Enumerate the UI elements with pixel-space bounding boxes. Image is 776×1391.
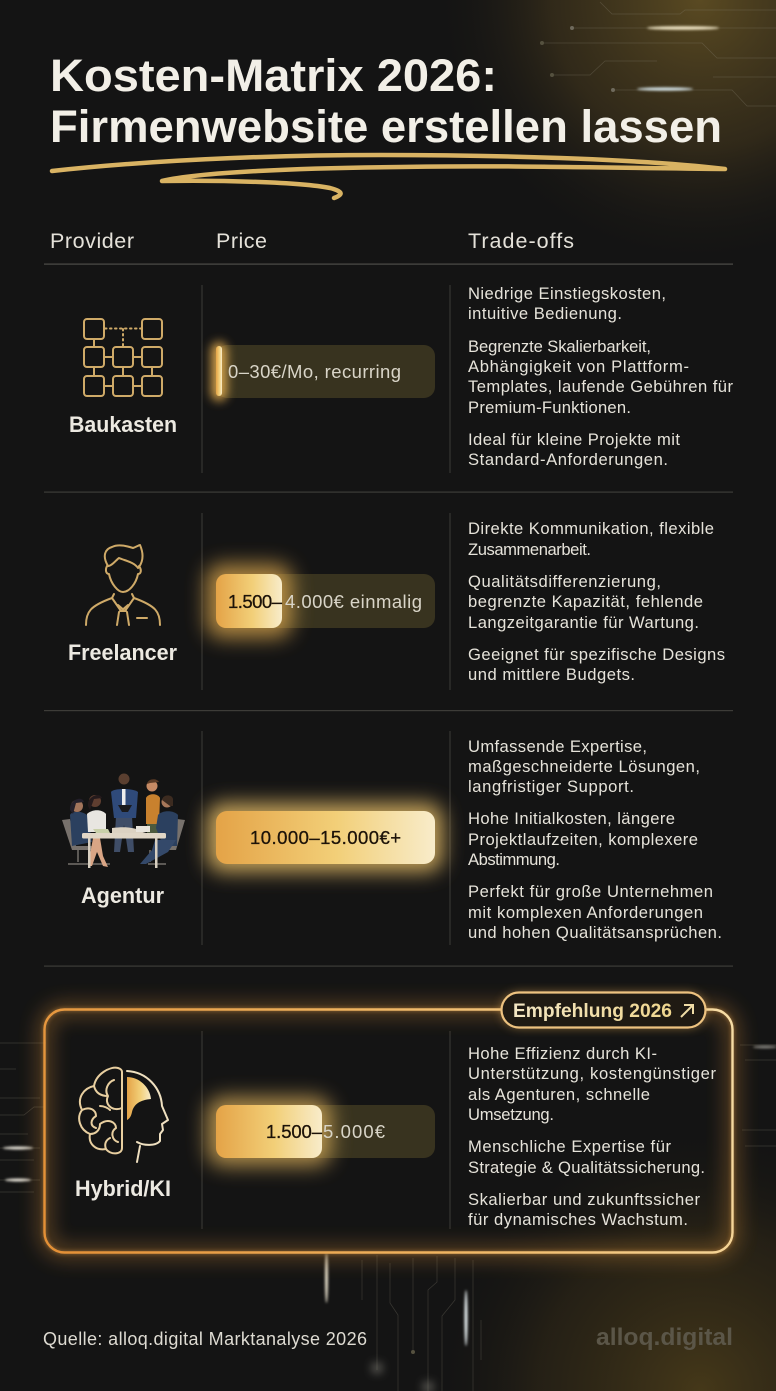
trade-offs: Agentur: Perfekt für große Unternehmen <box>468 882 713 901</box>
trade-offs: Freelancer: Langzeitgarantie für Wartung. <box>468 613 699 632</box>
trade-offs: Hybrid/KI: Menschliche Expertise für <box>468 1137 671 1156</box>
trade-offs: Freelancer: Direkte Kommunikation, flexible <box>468 519 714 538</box>
icon: building blocks <box>84 319 162 396</box>
price bar: Baukasten <box>211 342 435 401</box>
price bar: Hybrid/KI: 5.000€ <box>323 1121 386 1142</box>
table header <box>44 229 733 265</box>
panel: Freelancer row <box>68 519 725 684</box>
trade-offs: Agentur: maßgeschneiderte Lösungen, <box>468 757 700 776</box>
label: Hybrid/KI: Hybrid/KI <box>75 1176 171 1201</box>
trade-offs: Hybrid/KI: als Agenturen, schnelle <box>468 1085 650 1104</box>
trade-offs: Baukasten: Niedrige Einstiegskosten, <box>468 284 666 303</box>
price bar: Hybrid/KI: 1.500– <box>266 1121 323 1142</box>
badge: Empfehlung 2026: Empfehlung 2026 <box>513 1001 672 1022</box>
highlight frame <box>44 1010 732 1252</box>
trade-offs: Baukasten: intuitive Bedienung. <box>468 304 622 323</box>
trade-offs: Hybrid/KI: Unterstützung, kostengünstiger <box>468 1064 716 1083</box>
label: Freelancer: Freelancer <box>68 640 177 665</box>
trade-offs: Hybrid/KI <box>468 1044 716 1229</box>
price bar: Freelancer <box>206 564 435 638</box>
price bar: Hybrid/KI <box>207 1097 435 1166</box>
trade-offs: Agentur: Umfassende Expertise, <box>468 737 647 756</box>
circuit decoration: left <box>0 1043 46 1192</box>
trade-offs: Freelancer: und mittlere Budgets. <box>468 665 635 684</box>
icon: agency team at table <box>62 774 185 868</box>
panel: Hybrid/KI recommended row <box>44 992 732 1252</box>
panel: Agentur row <box>62 737 722 942</box>
source note: Quelle: alloq.digital Marktanalyse 2026 <box>43 1329 367 1349</box>
trade-offs: Agentur: mit komplexen Anforderungen <box>468 903 703 922</box>
trade-offs: Baukasten: Begrenzte Skalierbarkeit, <box>468 337 651 356</box>
trade-offs: Freelancer: Geeignet für spezifische Designs <box>468 645 725 664</box>
trade-offs: Agentur: Projektlaufzeiten, komplexere <box>468 830 698 849</box>
trade-offs: Agentur: Abstimmung. <box>468 850 560 869</box>
table header: Provider <box>50 229 134 253</box>
trade-offs: Hybrid/KI: für dynamisches Wachstum. <box>468 1210 688 1229</box>
trade-offs: Agentur: langfristiger Support. <box>468 777 634 796</box>
icon: freelancer person <box>86 545 160 625</box>
trade-offs: Agentur <box>468 737 722 942</box>
circuit decoration: top right <box>540 2 776 106</box>
circuit decoration: right <box>740 1045 776 1146</box>
trade-offs: Agentur: Hohe Initialkosten, längere <box>468 809 675 828</box>
panel: Baukasten row <box>69 284 733 469</box>
trade-offs: Hybrid/KI: Strategie & Qualitätssicherung. <box>468 1158 705 1177</box>
trade-offs: Baukasten: Standard-Anforderungen. <box>468 450 668 469</box>
trade-offs: Agentur: und hohen Qualitätsansprüchen. <box>468 923 722 942</box>
trade-offs: Baukasten <box>468 284 733 469</box>
title <box>50 50 722 152</box>
table header: Price <box>216 229 267 253</box>
trade-offs: Freelancer: begrenzte Kapazität, fehlende <box>468 592 703 611</box>
trade-offs: Freelancer <box>468 519 725 684</box>
price bar: Freelancer: 4.000€ einmalig <box>285 591 422 612</box>
table header: Trade-offs <box>468 229 574 253</box>
circuit decoration: bottom <box>325 1253 481 1391</box>
trade-offs: Freelancer: Qualitätsdifferenzierung, <box>468 572 661 591</box>
badge: Empfehlung 2026 <box>502 992 706 1028</box>
label: Baukasten: Baukasten <box>69 412 177 437</box>
price bar: Agentur: 10.000–15.000€+ <box>250 827 401 848</box>
label: Agentur: Agentur <box>81 883 164 908</box>
trade-offs: Baukasten: Ideal für kleine Projekte mit <box>468 430 680 449</box>
trade-offs: Hybrid/KI: Umsetzung. <box>468 1105 554 1124</box>
trade-offs: Hybrid/KI: Hohe Effizienz durch KI- <box>468 1044 657 1063</box>
trade-offs: Baukasten: Abhängigkeit von Plattform- <box>468 357 689 376</box>
trade-offs: Baukasten: Premium-Funktionen. <box>468 398 631 417</box>
icon: brain and head <box>79 1068 168 1162</box>
trade-offs: Freelancer: Zusammenarbeit. <box>468 540 591 559</box>
trade-offs: Hybrid/KI: Skalierbar und zukunftssicher <box>468 1190 700 1209</box>
price bar: Agentur <box>207 803 443 872</box>
brand wordmark: alloq.digital <box>596 1324 733 1351</box>
price bar: Baukasten: 0–30€/Mo, recurring <box>228 361 401 382</box>
title: Firmenwebsite erstellen lassen <box>50 101 722 152</box>
title underline swoosh <box>52 155 725 198</box>
title: Kosten-Matrix 2026: <box>50 50 497 101</box>
trade-offs: Baukasten: Templates, laufende Gebühren für <box>468 377 733 396</box>
price bar: Freelancer: 1.500– <box>228 591 283 612</box>
